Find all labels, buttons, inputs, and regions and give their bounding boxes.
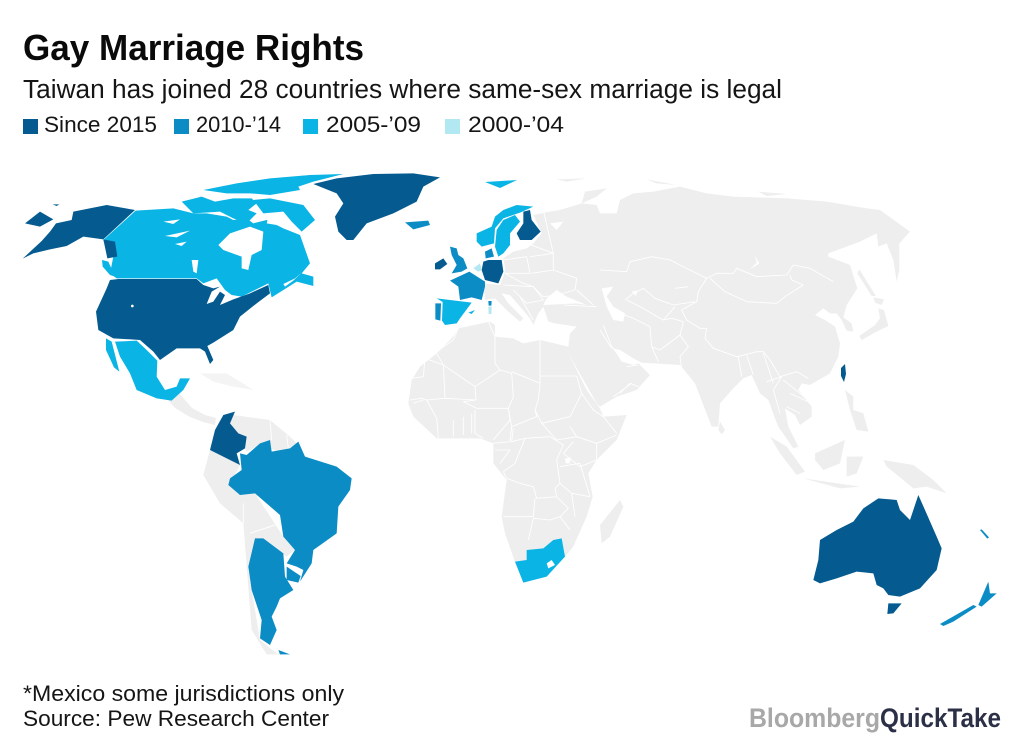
Europe borders <box>503 210 597 320</box>
Africa borders <box>410 322 617 540</box>
Germany <box>482 260 503 283</box>
Australia <box>813 495 942 597</box>
Netherlands <box>473 263 482 272</box>
UK <box>450 247 467 273</box>
New Zealand <box>940 582 997 626</box>
source: Source: Pew Research Center <box>23 706 329 731</box>
Portugal <box>435 303 441 321</box>
Caspian, Aral, Baikal <box>602 256 759 322</box>
Lake Victoria <box>565 457 571 463</box>
logo: Bloomberg QuickTake <box>749 703 1001 733</box>
South America countries <box>210 412 565 654</box>
footnote <box>23 681 344 731</box>
Madagascar <box>600 500 623 543</box>
world map <box>23 173 997 654</box>
Mexico <box>102 260 190 401</box>
Tasmania <box>887 603 902 614</box>
Ireland <box>435 258 447 269</box>
legend item: 2010-14: 2010-’14 <box>196 112 281 137</box>
legend item: since 2015: Since 2015 <box>44 112 157 137</box>
Canada <box>103 174 343 297</box>
Finland <box>517 210 541 240</box>
Eurasia, gray land <box>483 178 910 448</box>
subtitle: Taiwan has joined 28 countries where same-sex marriage is legal <box>23 76 782 104</box>
Sardinia <box>488 307 492 314</box>
New Caledonia <box>980 529 989 539</box>
Japan, Sakhalin, Arctic islands <box>557 178 888 340</box>
Black Sea, White Sea <box>543 222 587 305</box>
Colombia <box>210 412 247 465</box>
Oceania countries <box>813 495 997 626</box>
Lesotho <box>547 560 555 568</box>
Europe countries <box>405 205 541 325</box>
Central and South Asia borders <box>600 256 833 413</box>
Denmark <box>485 248 494 258</box>
Spain <box>437 298 475 325</box>
Canadian lakes, Hudson Bay, gulfs <box>163 213 302 287</box>
Southeast Asia and Oceania, gray land <box>718 390 947 493</box>
Argentina <box>248 538 293 654</box>
Brazil <box>228 440 352 582</box>
legend item: 2000-04: 2000-’04 <box>468 112 564 137</box>
Svalbard <box>485 180 517 188</box>
title: Gay Marriage Rights <box>23 27 364 68</box>
legend item: 2005-09: 2005-’09 <box>326 112 421 137</box>
France <box>450 272 492 306</box>
South and Central America, gray land <box>168 373 300 654</box>
Uruguay <box>287 567 301 583</box>
North America countries <box>23 173 440 401</box>
Iceland <box>405 221 430 229</box>
South Africa <box>515 538 565 583</box>
Alaska and USA <box>23 204 270 364</box>
Utah lake <box>131 305 134 307</box>
footnote: Mexico: *Mexico some jurisdictions only <box>23 681 344 706</box>
logo: Bloomberg QuickTake: Bloomberg <box>749 703 880 733</box>
Greenland <box>313 173 440 240</box>
Norway <box>477 205 533 247</box>
logo: Bloomberg QuickTake: QuickTake <box>880 703 1001 733</box>
legend <box>23 112 564 137</box>
Taiwan <box>841 364 846 382</box>
Africa, gray land <box>408 322 627 582</box>
Sweden <box>495 215 520 257</box>
